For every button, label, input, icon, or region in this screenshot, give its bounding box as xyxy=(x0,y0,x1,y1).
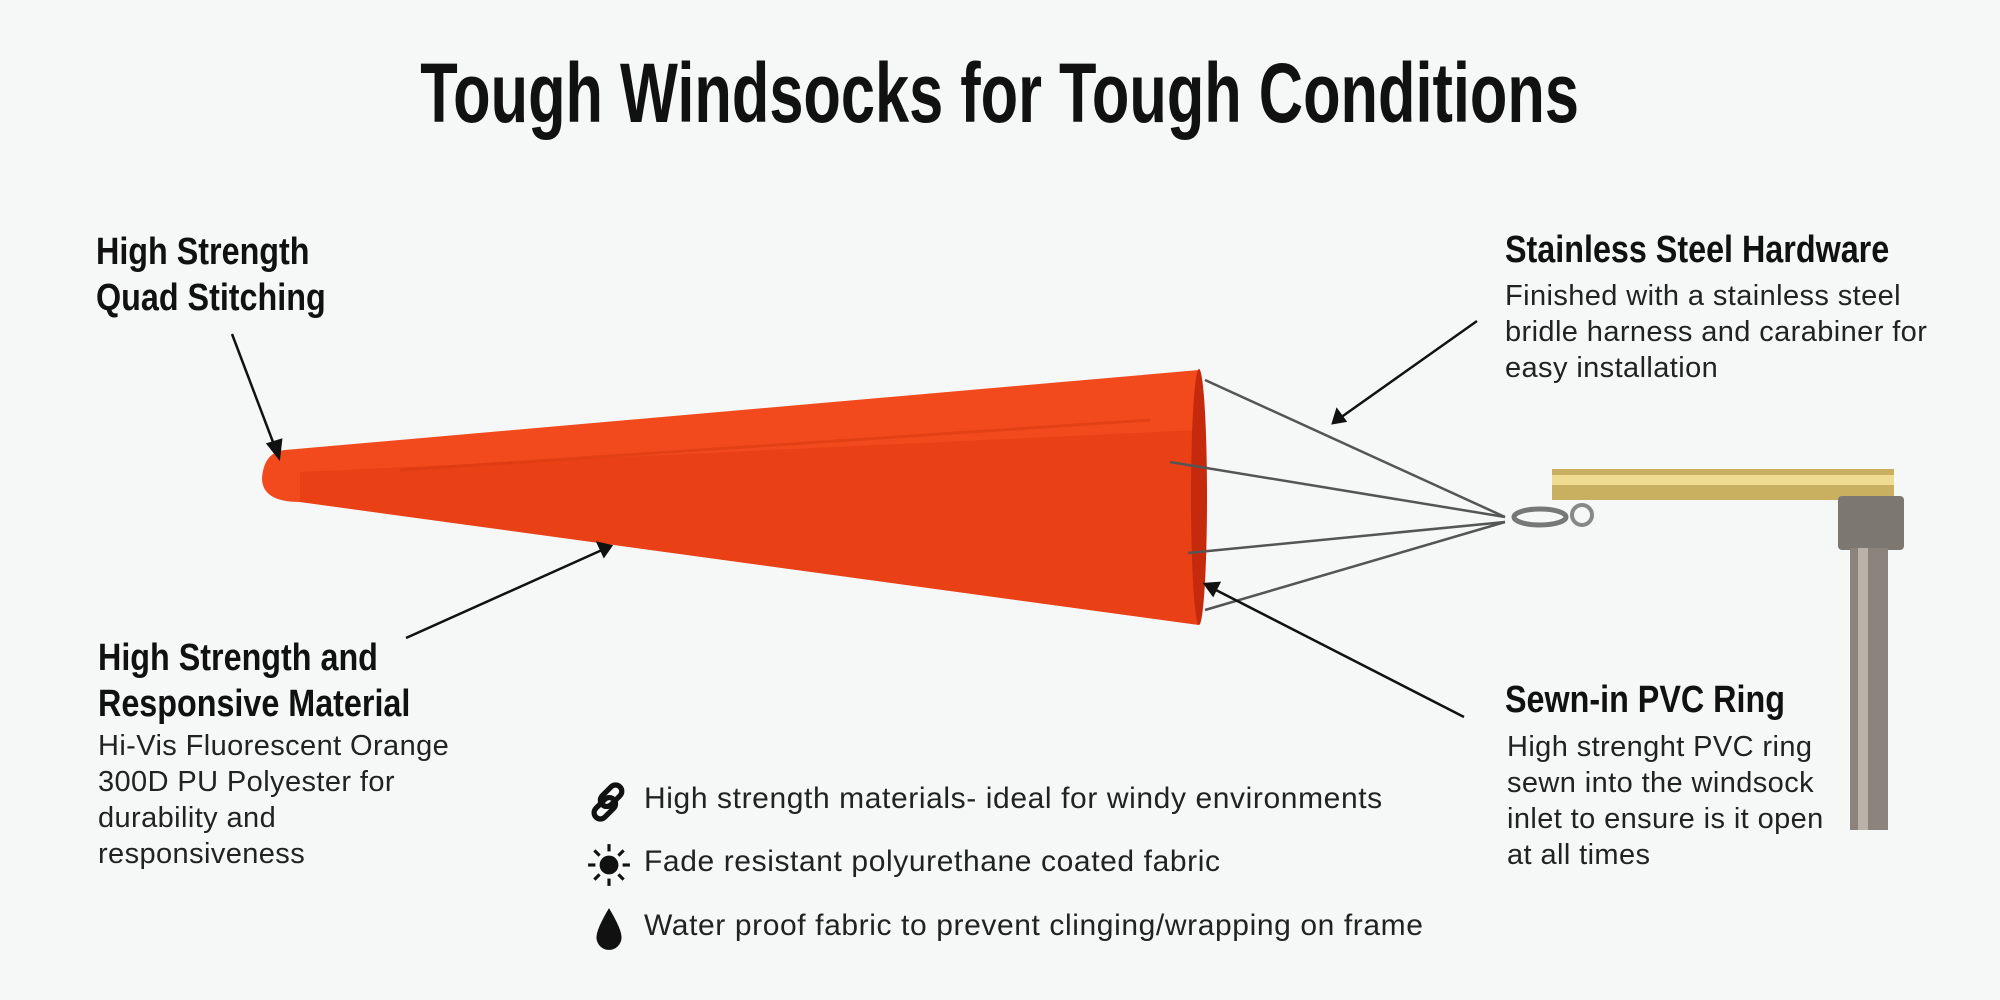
text: hardware description: easy installation xyxy=(1505,352,1718,384)
title: Tough Windsocks for Tough Conditions xyxy=(421,46,1579,140)
arrow: PVC ring xyxy=(1205,583,1464,717)
bullet: high strength materials: High strength materials- ideal for windy environments xyxy=(644,782,1383,815)
arrow: material xyxy=(406,543,611,638)
heading: quad stitching: Quad Stitching xyxy=(96,277,326,319)
text: PVC ring description: at all times xyxy=(1507,839,1650,871)
text: PVC ring description xyxy=(1507,731,1824,871)
heading: material: Responsive Material xyxy=(98,683,410,725)
heading: quad stitching xyxy=(96,231,326,319)
text: hardware description xyxy=(1505,280,1927,384)
text: hardware description: bridle harness and carabiner for xyxy=(1505,316,1927,348)
text: PVC ring description: High strenght PVC ring xyxy=(1507,731,1812,763)
text: material description xyxy=(98,730,449,870)
windsock body xyxy=(262,369,1207,625)
bridle wires and carabiner xyxy=(1170,380,1592,610)
heading: material: High Strength and xyxy=(98,637,378,679)
text: material description: responsiveness xyxy=(98,838,305,870)
heading: material xyxy=(98,637,410,725)
text: material description: 300D PU Polyester for xyxy=(98,766,395,798)
bullet: water proof: Water proof fabric to prevent clinging/wrapping on frame xyxy=(644,909,1424,942)
text: hardware description: Finished with a stainless steel xyxy=(1505,280,1901,312)
text: PVC ring description: sewn into the windsock xyxy=(1507,767,1814,799)
mounting arm and pole xyxy=(1552,469,1904,830)
arrow: hardware xyxy=(1333,321,1477,423)
icon: chain link xyxy=(592,782,624,822)
heading: quad stitching: High Strength xyxy=(96,231,310,273)
text: material description: durability and xyxy=(98,802,276,834)
bullet: fade resistant: Fade resistant polyurethane coated fabric xyxy=(644,845,1221,878)
icon: sun xyxy=(588,844,630,886)
text: PVC ring description: inlet to ensure is it open xyxy=(1507,803,1824,835)
heading: stainless steel hardware: Stainless Steel Hardware xyxy=(1505,229,1889,271)
arrow: quad stitching xyxy=(232,334,281,458)
text: material description: Hi-Vis Fluorescent Orange xyxy=(98,730,449,762)
icon: water drop xyxy=(596,908,622,950)
heading: PVC ring: Sewn-in PVC Ring xyxy=(1505,679,1785,721)
